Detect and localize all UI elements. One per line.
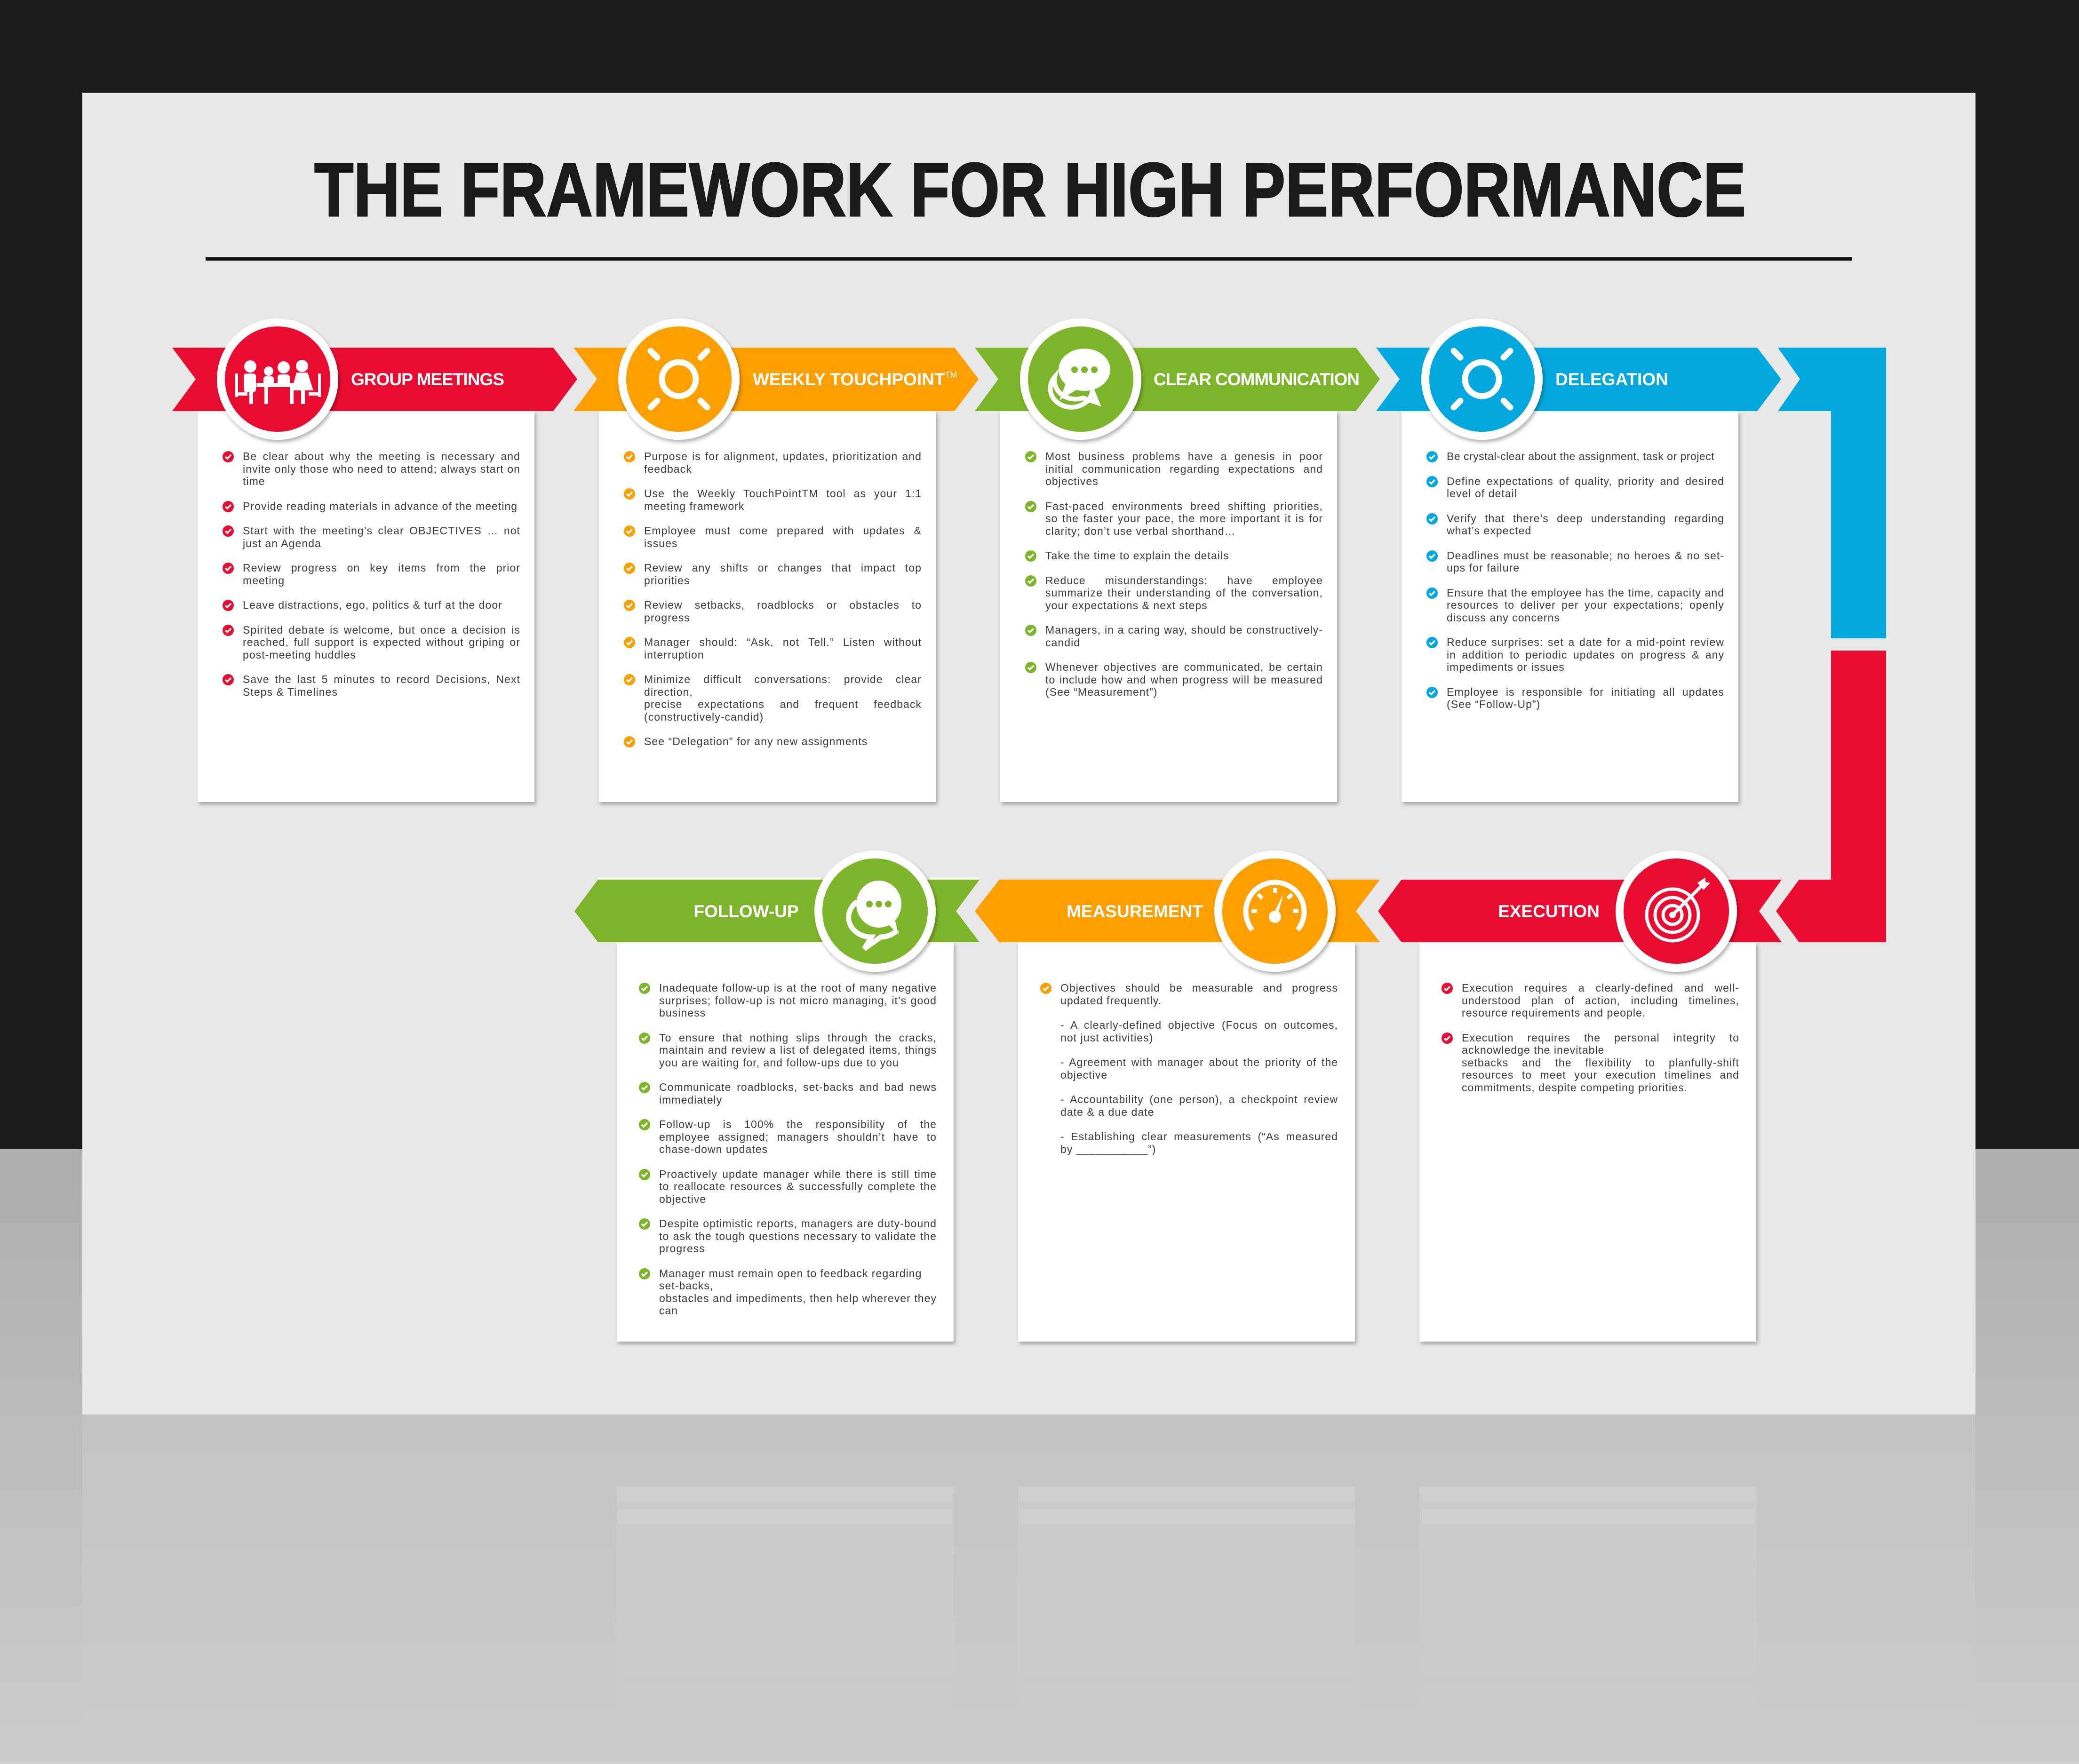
text block: delegation: Define expectations of quality, priority and desired level of detail (1447, 475, 1724, 500)
text block: measurement: - Establishing clear measurements (“As measured by ___________”) (1060, 1130, 1338, 1155)
text block: measurement: - Accountability (one person), a checkpoint review date & a due date (1060, 1093, 1338, 1118)
text block: follow-up: Proactively update manager while there is still time to reallocate resources & successfully complete the objective (659, 1168, 937, 1205)
icon: group meetings (217, 318, 338, 440)
text block: execution: Execution requires a clearly-defined and well-understood plan of action, including timelines, resource requirements and people. (1462, 982, 1739, 1019)
text block: weekly touchpoint: Purpose is for alignment, updates, prioritization and feedback (644, 450, 922, 475)
text block: measurement: - A clearly-defined objective (Focus on outcomes, not just activities) (1060, 1019, 1338, 1043)
banner: clear communication: CLEAR COMMUNICATION (1154, 370, 1360, 389)
banner: group meetings: GROUP MEETINGS (351, 370, 504, 389)
text block: follow-up: Follow-up is 100% the responsibility of the employee assigned; managers shouldn’t have to chase-down updates (659, 1118, 937, 1155)
text block: weekly touchpoint: Use the Weekly TouchPointTM tool as your 1:1 meeting framework (644, 487, 922, 512)
text block: weekly touchpoint (644, 450, 922, 760)
text block: delegation: Ensure that the employee has the time, capacity and resources to deliver per your expectations; openly discuss any concerns (1447, 586, 1724, 624)
text block: weekly touchpoint: Review any shifts or changes that impact top priorities (644, 562, 922, 586)
icon: execution (1616, 850, 1737, 972)
text block: clear communication (1045, 450, 1323, 710)
banner: follow-up (574, 880, 980, 942)
text block: clear communication: Fast-paced environments breed shifting priorities, so the faster your pace, the more important it is for clarity; don’t use verbal shorthand… (1045, 500, 1323, 537)
text block: weekly touchpoint: Employee must come prepared with updates & issues (644, 524, 922, 549)
connector red (1776, 651, 1886, 942)
text block: clear communication: Take the time to explain the details (1045, 549, 1229, 562)
text block: group meetings: Provide reading materials in advance of the meeting (243, 500, 518, 512)
text block: execution (1462, 982, 1739, 1106)
connector blue (1778, 348, 1886, 638)
text block: clear communication: Whenever objectives are communicated, be certain to include how and when progress will be measured (See “Measurement”) (1045, 661, 1323, 698)
banner: weekly touchpoint: WEEKLY TOUCHPOINT (753, 370, 945, 389)
text block: group meetings: Review progress on key items from the prior meeting (243, 562, 520, 586)
text block: follow-up (659, 982, 937, 1329)
text block: clear communication: Most business problems have a genesis in poor initial communication regarding expectations and objectives (1045, 450, 1323, 487)
text block: delegation: Deadlines must be reasonable; no heroes & no set-ups for failure (1447, 549, 1724, 574)
text block: delegation: Employee is responsible for initiating all updates (See “Follow-Up”) (1447, 686, 1724, 710)
poster background (82, 93, 1975, 1414)
reflection (82, 1414, 1975, 1744)
text block: follow-up: Communicate roadblocks, set-backs and bad news immediately (659, 1081, 937, 1105)
text block: follow-up: Inadequate follow-up is at the root of many negative surprises; follow-up is not micro managing, it’s good business (659, 982, 937, 1019)
text block: group meetings: Start with the meeting’s clear OBJECTIVES … not just an Agenda (243, 524, 520, 549)
text block: delegation: Be crystal-clear about the assignment, task or project (1447, 450, 1714, 462)
text block: group meetings: Be clear about why the meeting is necessary and invite only those who need to attend; always start on time (243, 450, 520, 487)
banner: execution: EXECUTION (1498, 902, 1600, 921)
icon: weekly touchpoint (618, 318, 740, 440)
icon: follow-up (814, 850, 936, 972)
text block: execution: setbacks and the flexibility to planfully-shift resources to meet your execution timelines and commitments, despite competing priorities. (1462, 1057, 1739, 1093)
banner: measurement: MEASUREMENT (1067, 902, 1203, 921)
text block: group meetings: Leave distractions, ego, politics & turf at the door (243, 599, 502, 611)
text block: weekly touchpoint: precise expectations and frequent feedback (constructively-candid) (644, 698, 922, 723)
text block: weekly touchpoint: Manager should: “Ask, not Tell.” Listen without interruption (644, 636, 922, 660)
title: THE FRAMEWORK FOR HIGH PERFORMANCE (314, 147, 1746, 232)
banner: clear communication (975, 348, 1380, 411)
text block: delegation (1447, 450, 1724, 723)
text block: follow-up: set-backs, (659, 1279, 713, 1292)
text block: weekly touchpoint: Minimize difficult conversations: provide clear direction, (644, 673, 922, 698)
icon: clear communication (1020, 318, 1141, 440)
text block: execution: Execution requires the personal integrity to acknowledge the inevitable (1462, 1031, 1739, 1056)
text block: group meetings: Save the last 5 minutes to record Decisions, Next Steps & Timelines (243, 673, 520, 698)
panel cards (198, 411, 1756, 1342)
text block: follow-up: obstacles and impediments, then help wherever they can (659, 1292, 937, 1317)
text block: delegation: Reduce surprises: set a date for a mid-point review in addition to periodic updates on progress & any impediments or issues (1447, 636, 1724, 673)
banner: group meetings (172, 348, 577, 411)
banner: delegation (1376, 348, 1781, 411)
banner: measurement (975, 880, 1380, 942)
icon: measurement (1214, 850, 1336, 972)
text block: clear communication: Reduce misunderstandings: have employee summarize their understanding of the conversation, your expectations & next steps (1045, 574, 1323, 612)
banner: weekly touchpoint (574, 348, 979, 411)
banner: delegation: DELEGATION (1555, 370, 1668, 389)
banner: follow-up: FOLLOW-UP (693, 902, 799, 921)
text block: measurement (1060, 982, 1338, 1168)
text block: weekly touchpoint: Review setbacks, roadblocks or obstacles to progress (644, 599, 922, 624)
text block: clear communication: Managers, in a caring way, should be constructively-candid (1045, 624, 1323, 648)
text block: group meetings (243, 450, 520, 710)
text block: follow-up: Despite optimistic reports, managers are duty-bound to ask the tough questions necessary to validate the progress (659, 1217, 937, 1255)
banner: weekly touchpoint: TM (945, 370, 957, 380)
text block: measurement: Objectives should be measurable and progress updated frequently. (1060, 982, 1338, 1007)
text block: weekly touchpoint: See “Delegation” for any new assignments (644, 735, 868, 747)
text block: follow-up: To ensure that nothing slips through the cracks, maintain and review a list of delegated items, things you are waiting for, and follow-ups due to you (659, 1031, 937, 1069)
text block: group meetings: Spirited debate is welcome, but once a decision is reached, full support is expected without griping or post-meeting huddles (243, 624, 520, 660)
banner: execution (1378, 880, 1782, 942)
text block: follow-up: Manager must remain open to feedback regarding (659, 1267, 922, 1279)
text block: delegation: Verify that there’s deep understanding regarding what’s expected (1447, 512, 1724, 537)
icon: delegation (1421, 318, 1543, 440)
text block: measurement: - Agreement with manager about the priority of the objective (1060, 1056, 1338, 1081)
